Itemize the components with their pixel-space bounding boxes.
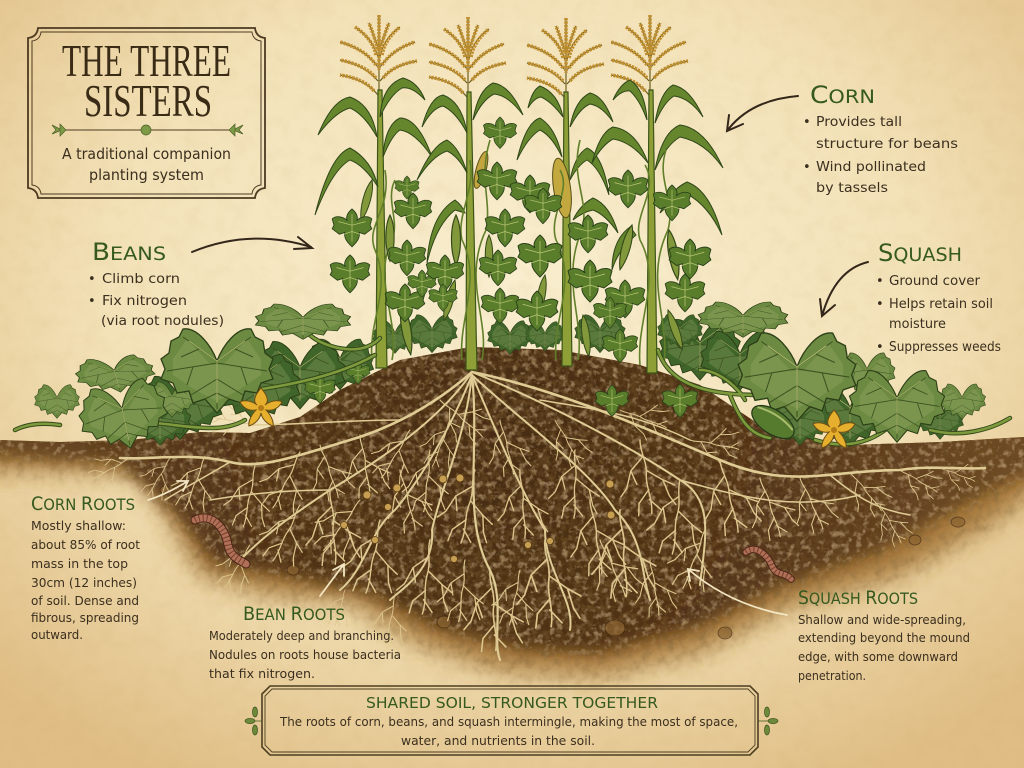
sprig right <box>758 707 778 735</box>
label: corn roots: fibrous, spreading <box>31 611 139 625</box>
sprig left <box>245 707 262 735</box>
arrow: squash to plant <box>820 262 868 316</box>
label: squash: SQUASH <box>878 239 962 267</box>
label: squash: moisture <box>889 317 946 332</box>
label: corn: Wind pollinated <box>816 160 926 175</box>
label: bean roots: BEAN ROOTS <box>243 603 345 625</box>
root system <box>84 372 985 660</box>
arrow: corn roots <box>148 481 188 500</box>
label: corn <box>803 81 958 196</box>
label: corn: • <box>803 115 811 130</box>
squash plants right <box>658 302 1010 448</box>
squash vines left <box>15 335 380 430</box>
label: squash roots: extending beyond the mound <box>798 631 970 645</box>
panel frame <box>262 686 758 755</box>
label: squash: • <box>876 274 884 289</box>
label: corn roots: about 85% of root <box>31 538 140 552</box>
title: THE THREE <box>62 35 231 86</box>
label: squash roots: penetration. <box>798 669 866 683</box>
title frame <box>28 28 265 198</box>
label: squash: Helps retain soil <box>889 297 993 312</box>
panel text <box>279 715 738 748</box>
panel text: water, and nutrients in the soil. <box>401 734 595 748</box>
label: corn: by tassels <box>816 181 888 196</box>
main roots <box>120 372 985 660</box>
label: corn roots <box>31 493 140 642</box>
root nodules <box>340 474 615 562</box>
label: squash roots <box>798 587 970 683</box>
label: squash: • <box>876 340 884 355</box>
fine rootlets <box>84 443 138 493</box>
stones in soil <box>160 486 965 639</box>
subtitle: planting system <box>89 166 204 184</box>
title panel <box>28 28 265 198</box>
corn plant 1 <box>315 15 432 368</box>
label: corn roots: 30cm (12 inches) <box>31 576 137 590</box>
arrow: corn to plant <box>727 96 798 131</box>
bean vines <box>372 140 670 365</box>
label: corn roots: outward. <box>31 628 83 642</box>
icon: right earthworm <box>746 549 791 579</box>
label: squash <box>876 239 1001 355</box>
label: bean roots: that fix nitrogen. <box>209 667 315 681</box>
bean pods <box>358 179 376 222</box>
label: bean roots: Nodules on roots house bacteria <box>209 648 401 662</box>
squash vines right <box>658 350 1010 444</box>
squash flower right <box>813 410 855 448</box>
label: corn roots: Mostly shallow: <box>31 519 126 533</box>
label: bean roots: Moderately deep and branching. <box>209 629 394 643</box>
label: squash roots: SQUASH ROOTS <box>798 587 918 609</box>
arrow: squash roots <box>688 569 787 615</box>
corn plant 2 <box>417 17 523 370</box>
soil mound cross-section <box>0 300 1024 676</box>
label: corn: CORN <box>810 81 875 109</box>
label: corn: structure for beans <box>816 137 958 152</box>
subtitle <box>62 145 231 184</box>
background foliage along the mound <box>129 315 964 446</box>
icon: left earthworm <box>195 518 246 564</box>
panel heading: SHARED SOIL, STRONGER TOGETHER <box>366 694 658 712</box>
label: squash: Suppresses weeds <box>889 340 1001 355</box>
label: squash: Ground cover <box>889 274 981 289</box>
label: beans: BEANS <box>92 238 166 266</box>
corn plants <box>315 15 723 373</box>
panel text: The roots of corn, beans, and squash intermingle, making the most of space, <box>279 715 738 729</box>
label: bean roots <box>209 603 401 681</box>
title <box>62 35 231 126</box>
title: SISTERS <box>84 75 212 126</box>
panel: shared soil <box>245 686 778 755</box>
corn plant 3 <box>517 18 618 366</box>
label: beans: (via root nodules) <box>101 314 224 329</box>
corn plant 4 <box>592 15 723 373</box>
label: corn roots: CORN ROOTS <box>31 493 135 515</box>
label: squash: • <box>876 297 884 312</box>
bean vines and pods <box>305 117 711 418</box>
arrow: bean roots <box>320 564 344 596</box>
label: beans: Fix nitrogen <box>102 294 187 309</box>
squash flower left <box>240 388 282 426</box>
squash fruit <box>746 399 800 445</box>
label: corn: • <box>803 160 811 175</box>
label: corn roots: of soil. Dense and <box>31 594 139 608</box>
label: squash roots: edge, with some downward <box>798 650 958 664</box>
label: beans: Climb corn <box>102 272 180 287</box>
squash plants left <box>15 304 380 457</box>
label: beans: • <box>88 272 96 287</box>
label: corn roots: mass in the top <box>31 557 128 571</box>
bean leaves <box>394 193 432 229</box>
label: squash roots: Shallow and wide-spreading, <box>798 613 966 627</box>
label: corn: Provides tall <box>816 115 902 130</box>
label: beans <box>88 238 224 329</box>
arrow: beans to plant <box>192 237 312 252</box>
label: beans: • <box>88 294 96 309</box>
ornament divider <box>52 124 243 136</box>
subtitle: A traditional companion <box>62 145 231 163</box>
